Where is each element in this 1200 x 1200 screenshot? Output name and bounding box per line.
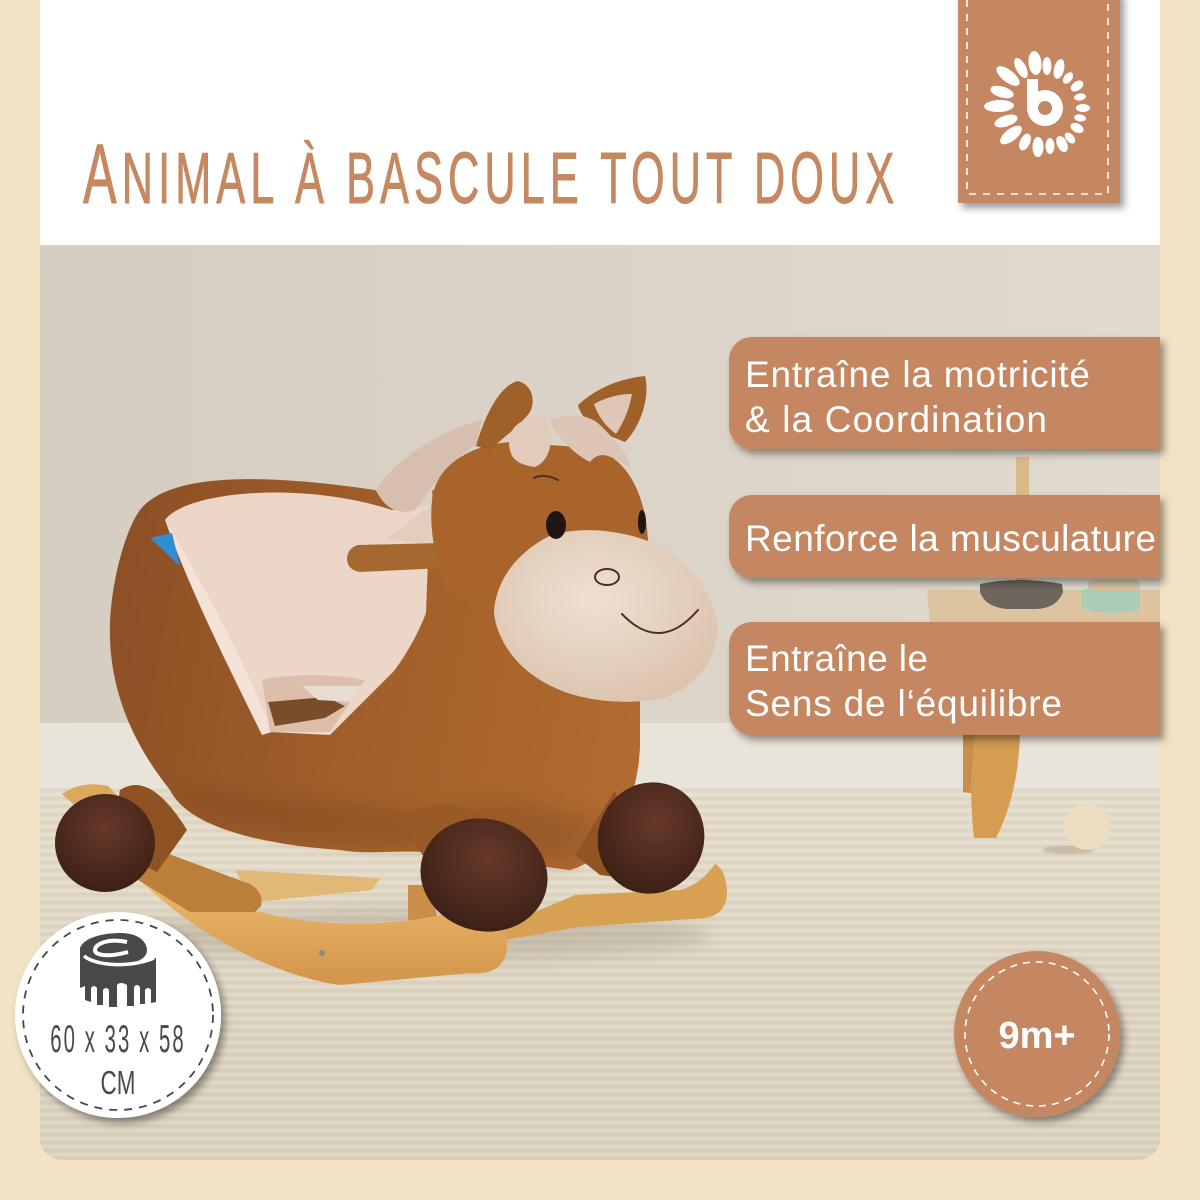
forelock — [509, 418, 551, 467]
benefit: musculature: Renforce la musculature — [745, 518, 1156, 559]
head — [431, 442, 648, 544]
mane back tufts — [376, 420, 482, 512]
rug — [40, 788, 1160, 1160]
benefit: musculature — [729, 495, 1160, 578]
size badge: 60 x 33 x 58 — [50, 1017, 186, 1061]
floor shadow — [130, 909, 710, 961]
face details — [534, 476, 698, 633]
benefit: motricité: & la Coordination — [745, 399, 1047, 440]
benefit: équilibre: Sens de l‘équilibre — [745, 683, 1062, 724]
logo tag — [958, 0, 1120, 203]
header panel — [40, 0, 1160, 245]
side table with toys — [927, 457, 1160, 838]
size badge — [15, 912, 221, 1118]
wooden ball — [1042, 804, 1110, 854]
seat cushion — [165, 492, 430, 735]
benefit: motricité: Entraîne la motricité — [745, 354, 1090, 395]
soft belly shading — [170, 790, 600, 865]
size badge: CM — [101, 1064, 135, 1101]
baseboard — [40, 723, 1160, 791]
age badge — [954, 951, 1120, 1117]
wall — [40, 245, 1160, 725]
muzzle — [494, 530, 718, 702]
seat base with strap — [262, 675, 365, 732]
age badge: 9m+ — [998, 1015, 1076, 1057]
benefit: motricité — [729, 337, 1160, 449]
seat back and body — [110, 479, 640, 870]
legs and hooves — [119, 785, 187, 872]
handle — [347, 543, 443, 572]
rocking horse — [55, 376, 727, 985]
stitching — [967, 0, 1108, 194]
photo panel — [40, 245, 1160, 1160]
icon: measuring tape — [80, 933, 156, 1007]
rockers — [62, 784, 727, 985]
benefit: équilibre — [729, 622, 1160, 735]
benefit: équilibre: Entraîne le — [745, 638, 928, 679]
blue tag — [150, 533, 180, 566]
neck and chest — [300, 490, 640, 870]
logo: sunflower b — [984, 50, 1090, 157]
title: ANIMAL À BASCULE TOUT DOUX — [83, 127, 894, 221]
ears — [476, 381, 533, 450]
